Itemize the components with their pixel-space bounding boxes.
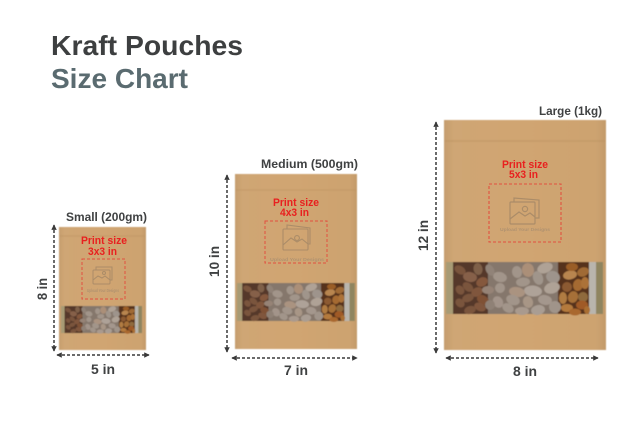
upload caption: medium: Upload Your Designs bbox=[270, 257, 325, 262]
arrow: small width bbox=[57, 354, 149, 356]
print size label: small: Print size bbox=[81, 235, 127, 247]
print area: large bbox=[489, 184, 561, 242]
heading: Kraft Pouches: Kraft Pouches bbox=[51, 30, 243, 61]
arrow: medium height bbox=[226, 175, 228, 352]
print size value: large: 5x3 in bbox=[509, 169, 538, 181]
panel: large pouch bbox=[415, 104, 606, 379]
arrow: large width bbox=[446, 357, 598, 359]
arrow: large height bbox=[435, 122, 437, 353]
panel: medium pouch bbox=[206, 157, 358, 378]
dimension: 8 in: 8 in bbox=[34, 278, 50, 300]
icon: image upload, small bbox=[93, 267, 112, 284]
icon: image upload, large bbox=[510, 198, 539, 224]
heading: Size Chart: Size Chart bbox=[51, 63, 188, 94]
icon: image upload, medium bbox=[283, 225, 310, 250]
dimension: 5 in: 5 in bbox=[91, 361, 115, 377]
print area: medium bbox=[265, 221, 327, 263]
arrow: medium width bbox=[232, 357, 357, 359]
panel: small pouch bbox=[34, 210, 149, 377]
print size value: small: 3x3 in bbox=[88, 246, 117, 258]
label: medium size: Medium (500gm) bbox=[261, 157, 358, 171]
print size label: medium: Print size bbox=[273, 197, 319, 209]
arrow: small height bbox=[53, 225, 55, 351]
title bbox=[51, 30, 243, 94]
print area: small bbox=[82, 259, 125, 299]
print size value: medium: 4x3 in bbox=[280, 207, 309, 219]
pouch body: small bbox=[59, 227, 146, 350]
label: small size: Small (200gm) bbox=[66, 210, 147, 224]
upload caption: large: Upload Your Designs bbox=[500, 227, 550, 232]
print size label: large: Print size bbox=[502, 159, 548, 171]
upload caption: small: Upload Your Designs bbox=[87, 288, 119, 293]
dimension: 12 in: 12 in bbox=[415, 220, 431, 251]
pouch body: large bbox=[444, 120, 606, 350]
dimension: 7 in: 7 in bbox=[284, 362, 308, 378]
dimension: 10 in: 10 in bbox=[206, 246, 222, 277]
dimension: 8 in: 8 in bbox=[513, 363, 537, 379]
pouch body: medium bbox=[235, 174, 357, 349]
label: large size: Large (1kg) bbox=[539, 104, 602, 118]
